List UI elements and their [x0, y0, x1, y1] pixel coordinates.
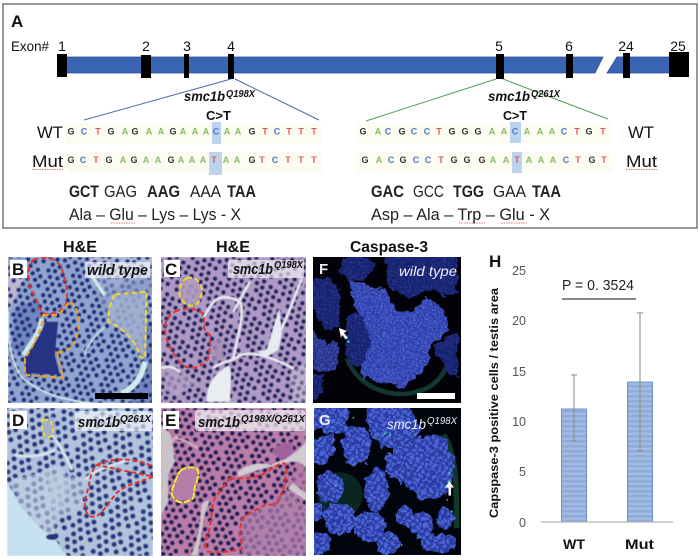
sequence WT exon 4: T	[286, 126, 292, 136]
y axis ticks: 5	[519, 465, 526, 479]
sequence Mut exon 4: A	[155, 155, 162, 165]
sequence WT exon 5: A	[489, 126, 496, 136]
label smc1b Q261X: smc1b	[78, 414, 120, 431]
dashed outlines D	[42, 420, 153, 517]
sequence WT exon 4: A	[224, 126, 231, 136]
panel F: caspase-3 wild type	[310, 254, 461, 403]
sequence Mut exon 5: T	[438, 155, 444, 165]
column headings: H&E	[63, 239, 97, 256]
label compound allele: smc1b	[198, 414, 240, 431]
sequence Mut exon 5: A	[538, 155, 545, 165]
sequence WT exon 4: C	[213, 126, 220, 136]
sequence Mut exon 5: T	[601, 155, 607, 165]
label B: B	[12, 260, 24, 279]
sequence Mut exon 5: A	[490, 155, 497, 165]
sequence WT exon 4: C	[81, 126, 88, 136]
error bars	[571, 313, 643, 451]
sequence row backgrounds	[66, 123, 613, 174]
codons exon 4: AAG	[147, 183, 180, 201]
scale bar B	[95, 393, 148, 399]
panel C: Q198X H&E	[160, 257, 308, 403]
exon numbers: 6	[565, 38, 573, 54]
label wild type: wild type	[87, 262, 148, 279]
exon numbers	[58, 38, 686, 54]
sequence Mut exon 5: C	[563, 155, 570, 165]
sequence WT exon 4: G	[169, 126, 177, 136]
dashed outlines C	[165, 278, 210, 368]
sequence WT exon 4: A	[180, 126, 187, 136]
sequence Mut exon 4: G	[248, 155, 256, 165]
label D: D	[12, 411, 24, 430]
sequence WT exon 5: T	[600, 126, 606, 136]
sequence Mut exon 4: T	[285, 155, 291, 165]
label smc1b Q261X: Q261X	[120, 414, 152, 425]
sequence WT exon 5: T	[436, 126, 442, 136]
label H: H	[489, 252, 501, 271]
sequence Mut exon 4: A	[143, 155, 150, 165]
sequence Mut exon 4: T	[211, 155, 217, 165]
sequence WT exon 4: A	[122, 126, 129, 136]
panel label A: A	[11, 12, 23, 31]
exon numbers: 3	[183, 38, 191, 54]
panel A: gene structure and sequences	[3, 4, 697, 228]
amino acids exon 4: Ala – Glu – Lys – Lys - X	[69, 206, 241, 224]
sequence WT exon 4: G	[107, 126, 115, 136]
sequence WT exon 5: G	[359, 126, 367, 136]
codons exon 4: GCT	[69, 183, 99, 201]
sequence Mut exon 5: A	[376, 155, 383, 165]
codons exon 4	[69, 183, 256, 201]
y axis ticks: 10	[512, 415, 526, 429]
sequence Mut exon 5: G	[361, 155, 369, 165]
scale bar F	[417, 393, 455, 399]
sequence WT exon 4: A	[146, 126, 153, 136]
amino acids exon 5: Asp – Ala – Trp – Glu - X	[371, 206, 550, 224]
label E: E	[165, 411, 176, 430]
sequence WT exon 4: A	[192, 126, 199, 136]
sequence WT exon 5: T	[574, 126, 580, 136]
label smc1b Q198X G	[387, 417, 458, 429]
zoom lines exon 5	[366, 79, 608, 121]
y axis ticks: 15	[512, 365, 526, 379]
y axis ticks: 25	[512, 264, 526, 278]
sequence Mut exon 5: C	[425, 155, 432, 165]
sequence Mut exon 5: G	[588, 155, 596, 165]
sequence Mut exon 4: T	[311, 155, 317, 165]
sequence Mut exon 4: A	[223, 155, 230, 165]
y axis ticks	[512, 264, 526, 530]
label smc1b Q198X: Q198X	[274, 260, 304, 271]
exon numbers: 2	[142, 38, 150, 54]
sequence WT exon 4: C	[274, 126, 281, 136]
sequence Mut exon 4: G	[130, 155, 138, 165]
panel H: bar chart	[487, 252, 673, 552]
sequence Mut exon 5: T	[514, 155, 520, 165]
exon numbers: 25	[670, 38, 686, 54]
label smc1b Q198X	[228, 260, 304, 278]
sequence WT exon 4: T	[298, 126, 304, 136]
label compound allele	[195, 410, 306, 431]
panel E: compound H&E	[161, 408, 308, 556]
panel A: gene structure and sequences: Q261X	[531, 89, 561, 100]
codons exon 5: GAC	[371, 183, 404, 201]
sequence Mut exon 4: C	[272, 155, 279, 165]
sequence WT exon 5: G	[474, 126, 482, 136]
label C: C	[165, 260, 177, 279]
codons exon 4: TAA	[227, 183, 256, 201]
sequence WT exon 5: G	[398, 126, 406, 136]
panel G: caspase-3 Q198X	[309, 402, 461, 555]
panel D: Q261X H&E	[7, 408, 153, 556]
sequence WT exon 4: T	[311, 126, 317, 136]
panel A: gene structure and sequences: Q198X	[226, 89, 256, 100]
sequence Mut exon 4: G	[105, 155, 113, 165]
sequence Mut exon 4: A	[120, 155, 127, 165]
label wild type F: wild type	[399, 263, 457, 279]
x axis	[541, 521, 673, 523]
sequence WT exon 5: C	[385, 126, 392, 136]
y axis ticks: 20	[512, 314, 526, 328]
sequence WT exon 5: C	[561, 126, 568, 136]
spell-check underlines	[32, 170, 657, 223]
sequence WT exon 5: A	[524, 126, 531, 136]
sequence WT exon 5: G	[461, 126, 469, 136]
exon blocks	[57, 52, 689, 79]
sequence Mut exon 5: T	[575, 155, 581, 165]
x labels: Mut	[625, 536, 654, 552]
sequence WT exon 4: T	[262, 126, 268, 136]
C>T labels	[206, 108, 527, 123]
codons exon 5	[371, 183, 561, 201]
arrow F	[339, 328, 348, 339]
sequence WT exon 5: A	[501, 126, 508, 136]
sequence WT exon 5: A	[537, 126, 544, 136]
sequence WT exon 5: C	[512, 126, 519, 136]
y axis title: Capspase-3 positive cells / testis area	[487, 288, 501, 518]
codons exon 5: GAA	[493, 183, 526, 201]
panel B: wild type H&E	[8, 255, 155, 405]
sequence Mut exon 4: A	[189, 155, 196, 165]
codons exon 5: TAA	[532, 183, 561, 201]
dashed outlines B	[25, 258, 147, 378]
sequence Mut exon 4: A	[178, 155, 185, 165]
codons exon 4: GAG	[104, 183, 137, 201]
WT Mut row labels: Mut	[626, 152, 657, 171]
sequence Mut exon 4: C	[80, 155, 87, 165]
allele name Q261X: smc1b	[488, 88, 530, 104]
WT Mut row labels: WT	[37, 123, 63, 142]
sequence Mut exon 5: G	[450, 155, 458, 165]
label smc1b Q198X: smc1b	[233, 261, 273, 278]
sequence Mut exon 4: T	[259, 155, 265, 165]
dashed outlines E	[171, 463, 287, 552]
sequence Mut exon 5: G	[478, 155, 486, 165]
sequence Mut exon 4: T	[298, 155, 304, 165]
sequence Mut exon 5: G	[399, 155, 407, 165]
sequence WT exon 4: A	[235, 126, 242, 136]
label smc1b Q261X	[75, 411, 152, 431]
column headings: H&E	[216, 239, 250, 256]
sequence Mut exon 4: G	[67, 155, 75, 165]
sequence WT exon 5: G	[585, 126, 593, 136]
sequence WT exon 5: A	[375, 126, 382, 136]
sequence Mut exon 5: A	[503, 155, 510, 165]
zoom lines exon 4	[84, 79, 319, 120]
p value: P = 0. 3524	[562, 278, 634, 294]
C>T labels: C>T	[206, 108, 231, 123]
sequence WT exon 5: C	[411, 126, 418, 136]
label smc1b Q198X G: smc1b	[387, 416, 426, 432]
sequence WT exon 4: G	[131, 126, 139, 136]
sequence WT exon 5: A	[549, 126, 556, 136]
label F: F	[319, 261, 328, 278]
label compound allele: Q198X/Q261X	[241, 414, 306, 425]
sequence WT exon 5: C	[424, 126, 431, 136]
sequence Mut exon 4: A	[234, 155, 241, 165]
C>T labels: C>T	[503, 108, 527, 123]
WT Mut row labels: WT	[628, 123, 654, 142]
sequence Mut exon 5: C	[413, 155, 420, 165]
label G: G	[319, 412, 331, 429]
sequence WT exon 4: G	[67, 126, 75, 136]
sequence Mut exon 4: A	[200, 155, 207, 165]
label smc1b Q198X G: Q198X	[427, 416, 457, 427]
exon numbers: 5	[495, 38, 503, 54]
allele name Q198X: smc1b	[184, 88, 225, 104]
sequence Mut exon 5: A	[526, 155, 533, 165]
x labels: WT	[563, 536, 585, 552]
sequence WT exon 4: G	[248, 126, 256, 136]
x labels	[563, 536, 654, 552]
y axis ticks: 0	[519, 516, 526, 530]
arrow G	[446, 482, 453, 495]
sequence Mut exon 5: G	[463, 155, 471, 165]
exon numbers: 1	[58, 38, 66, 54]
exon numbers: 24	[618, 38, 634, 54]
sequence Mut exon 5: A	[550, 155, 557, 165]
codons exon 5: GCC	[413, 183, 444, 201]
mutation highlights	[209, 122, 522, 175]
gene bar	[62, 57, 672, 73]
sequence Mut exon 4: T	[93, 155, 99, 165]
column headings	[63, 239, 428, 256]
sequence WT exon 4: A	[158, 126, 165, 136]
sequence WT exon 4: T	[95, 126, 101, 136]
exon numbers: 4	[227, 38, 235, 54]
sequence Mut exon 5: C	[388, 155, 395, 165]
WT Mut row labels	[32, 123, 657, 171]
sequence WT exon 4: A	[203, 126, 210, 136]
significance line	[562, 298, 636, 300]
codons exon 5: TGG	[453, 183, 484, 201]
column headings: Caspase-3	[350, 239, 428, 256]
bar Mut	[628, 382, 652, 522]
bar WT	[562, 409, 586, 522]
sequence WT exon 5: G	[448, 126, 456, 136]
exon label: Exon#	[11, 38, 49, 54]
WT Mut row labels: Mut	[32, 152, 63, 171]
codons exon 4: AAA	[190, 183, 221, 201]
sequence Mut exon 4: G	[167, 155, 175, 165]
